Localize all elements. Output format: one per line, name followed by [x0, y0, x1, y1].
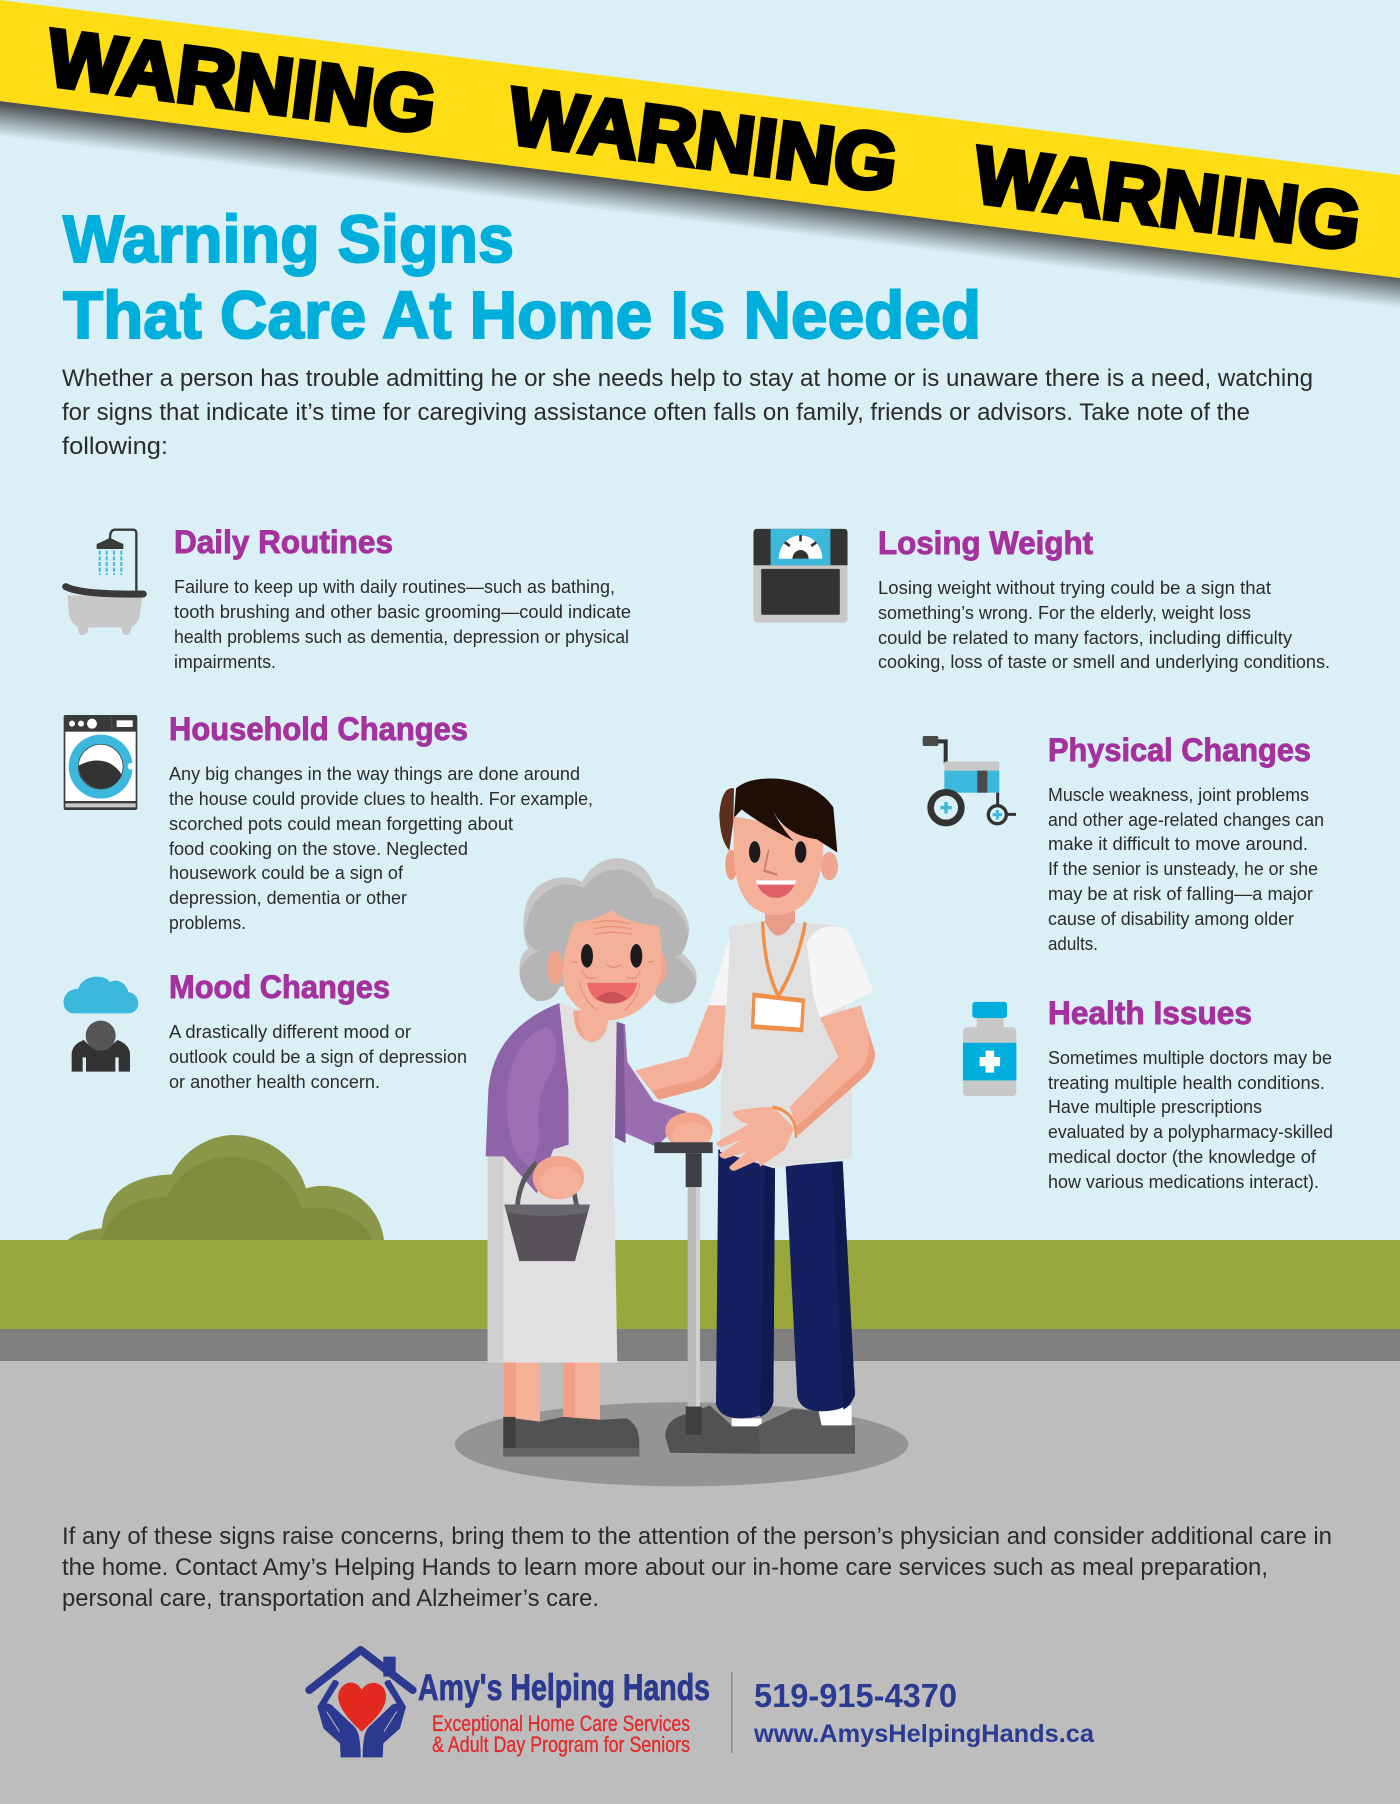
panel: health issues: [963, 995, 1333, 1192]
icon: wheelchair: [923, 736, 1016, 824]
heading: household changes: Household Changes: [169, 711, 468, 747]
heading: daily routines: Daily Routines: [174, 524, 393, 560]
logo wordmark: & Adult Day Program for Seniors: [432, 1732, 690, 1757]
text: mood changes: [169, 1022, 467, 1092]
text: health issues: [1048, 1048, 1333, 1192]
phone number: 519-915-4370: [754, 1677, 957, 1714]
icon: weighing scale: [754, 529, 848, 623]
text: losing weight: could be related to many factors, including difficulty: [878, 628, 1292, 648]
panel: household changes: [64, 711, 593, 933]
title: [63, 202, 981, 353]
text: household changes: the house could provide clues to health. For example,: [169, 789, 593, 809]
text: mood changes: or another health concern.: [169, 1072, 380, 1092]
text: physical changes: make it difficult to move around.: [1048, 834, 1308, 854]
closing paragraph: the home. Contact Amy’s Helping Hands to learn more about our in-home care services such as meal preparation,: [62, 1554, 1268, 1581]
text: health issues: evaluated by a polypharmacy-skilled: [1048, 1122, 1333, 1142]
title: Warning Signs: [63, 202, 514, 277]
caregiver: [635, 778, 875, 1454]
text: household changes: depression, dementia or other: [169, 888, 407, 908]
logo wordmark: Amy's Helping Hands: [418, 1667, 710, 1708]
text: household changes: problems.: [169, 913, 246, 933]
warning tape banner: WARNING: [43, 13, 441, 150]
text: mood changes: A drastically different mood or: [169, 1022, 411, 1042]
ground shadow: [455, 1402, 908, 1486]
warning tape banner: WARNING: [969, 130, 1366, 267]
panel: mood changes: [64, 969, 467, 1092]
text: losing weight: cooking, loss of taste or smell and underlying conditions.: [878, 652, 1330, 672]
text: household changes: scorched pots could mean forgetting about: [169, 814, 513, 834]
icon: washing machine: [64, 715, 137, 810]
senior woman: [486, 858, 713, 1457]
text: household changes: food cooking on the stove. Neglected: [169, 839, 468, 859]
intro paragraph: following:: [62, 433, 168, 460]
text: health issues: treating multiple health conditions.: [1048, 1073, 1325, 1093]
closing paragraph: personal care, transportation and Alzheimer’s care.: [62, 1585, 599, 1612]
panel: losing weight: [754, 525, 1330, 672]
heading: physical changes: Physical Changes: [1048, 732, 1311, 768]
bush: [67, 1135, 384, 1241]
text: daily routines: Failure to keep up with daily routines—such as bathing,: [174, 577, 615, 597]
text: health issues: Have multiple prescriptions: [1048, 1097, 1262, 1117]
warning tape banner: [0, 0, 1400, 330]
closing paragraph: [62, 1523, 1332, 1612]
text: physical changes: Muscle weakness, joint problems: [1048, 785, 1309, 805]
text: losing weight: Losing weight without trying could be a sign that: [878, 578, 1271, 598]
heading: health issues: Health Issues: [1048, 995, 1252, 1031]
text: daily routines: tooth brushing and other basic grooming—could indicate: [174, 602, 631, 622]
basket: [517, 1163, 577, 1206]
icon: medicine bottle: [963, 1002, 1016, 1096]
text: physical changes: If the senior is unsteady, he or she: [1048, 859, 1318, 879]
intro paragraph: Whether a person has trouble admitting he or she needs help to stay at home or is unaware there is a need, watching: [62, 365, 1313, 392]
text: household changes: housework could be a sign of: [169, 863, 404, 883]
text: health issues: Sometimes multiple doctors may be: [1048, 1048, 1332, 1068]
closing paragraph: If any of these signs raise concerns, bring them to the attention of the person’s physician and consider additional care in: [62, 1523, 1332, 1550]
text: daily routines: health problems such as dementia, depression or physical: [174, 627, 629, 647]
icon: logo house, hands and heart: [309, 1650, 413, 1757]
intro paragraph: [62, 365, 1313, 460]
website: www.AmysHelpingHands.ca: [753, 1720, 1095, 1748]
text: physical changes: adults.: [1048, 934, 1098, 954]
illustration: senior woman and caregiver: [455, 778, 908, 1486]
icon: rain cloud over person: [64, 977, 138, 1072]
warning tape banner: WARNING: [504, 71, 902, 208]
text: physical changes: may be at risk of falling—a major: [1048, 884, 1313, 904]
ground: grass, kerb and pavement: [0, 1240, 1400, 1804]
text: household changes: [169, 764, 593, 933]
text: health issues: medical doctor (the knowledge of: [1048, 1147, 1317, 1167]
text: losing weight: [878, 578, 1330, 672]
text: mood changes: outlook could be a sign of depression: [169, 1047, 467, 1067]
logo wordmark: Exceptional Home Care Services: [432, 1711, 690, 1736]
heading: mood changes: Mood Changes: [169, 969, 390, 1005]
text: physical changes: and other age-related changes can: [1048, 810, 1324, 830]
title: That Care At Home Is Needed: [63, 278, 981, 353]
text: household changes: Any big changes in the way things are done around: [169, 764, 580, 784]
text: losing weight: something’s wrong. For the elderly, weight loss: [878, 603, 1251, 623]
panel: daily routines: [66, 524, 631, 672]
text: daily routines: impairments.: [174, 652, 276, 672]
footer: logo and contact details: [309, 1650, 1095, 1757]
text: physical changes: cause of disability among older: [1048, 909, 1294, 929]
text: daily routines: [174, 577, 631, 672]
intro paragraph: for signs that indicate it’s time for caregiving assistance often falls on family, friends or advisors. Take note of the: [62, 399, 1250, 426]
text: physical changes: [1048, 785, 1324, 954]
hair: [519, 858, 697, 1004]
logo wordmark: [418, 1667, 710, 1757]
walking cane: [654, 1142, 713, 1435]
panel: physical changes: [923, 732, 1324, 954]
heading: losing weight: Losing Weight: [878, 525, 1093, 561]
text: health issues: how various medications interact).: [1048, 1172, 1319, 1192]
icon: bathtub with shower: [66, 530, 143, 635]
